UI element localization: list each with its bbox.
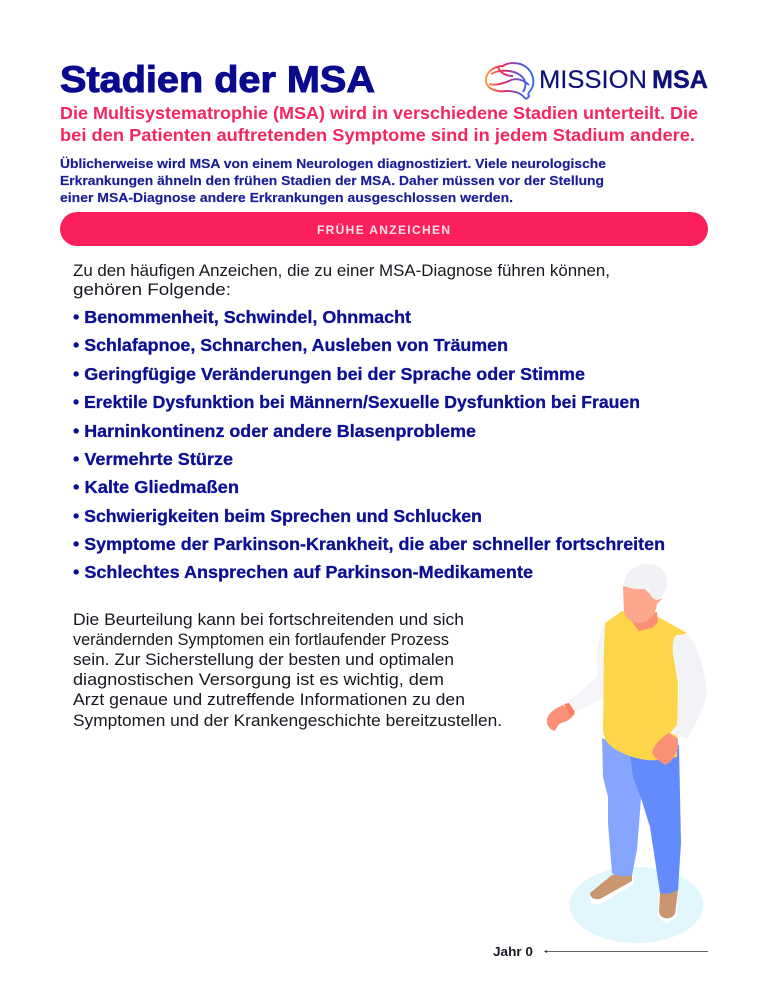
symptom list: • Benommenheit, Schwindel, Ohnmacht xyxy=(73,307,411,327)
symptom list: • Schwierigkeiten beim Sprechen und Schlucken xyxy=(73,506,482,526)
intro text xyxy=(60,156,606,205)
icon: brain outline xyxy=(486,63,533,99)
left hand xyxy=(547,703,575,731)
intro text: einer MSA-Diagnose andere Erkrankungen ausgeschlossen werden. xyxy=(60,190,513,205)
illustration: elderly man standing xyxy=(547,564,707,943)
symptom list: • Schlechtes Ansprechen auf Parkinson-Medikamente xyxy=(73,562,533,582)
timeline: year 0 xyxy=(493,945,708,959)
symptom list: • Schlafapnoe, Schnarchen, Ausleben von Träumen xyxy=(73,335,508,355)
symptom list xyxy=(73,307,665,582)
assessment paragraph: verändernden Symptomen ein fortlaufender Prozess xyxy=(73,630,449,649)
symptom list: • Harninkontinenz oder andere Blasenprobleme xyxy=(73,421,476,441)
ground shadow xyxy=(570,867,704,943)
collar and neck xyxy=(632,612,658,631)
logo: Mission MSA: MSA xyxy=(652,66,708,94)
lead-in text: Zu den häufigen Anzeichen, die zu einer MSA-Diagnose führen können, xyxy=(73,261,610,280)
logo wordmark: MISSION xyxy=(539,66,647,94)
intro text: Erkrankungen ähneln den frühen Stadien der MSA. Daher müssen vor der Stellung xyxy=(60,173,604,188)
lead-in text xyxy=(73,261,610,299)
intro text: Üblicherweise wird MSA von einem Neurologen diagnostiziert. Viele neurologische xyxy=(60,156,606,171)
symptom list: • Symptome der Parkinson-Krankheit, die aber schneller fortschreiten xyxy=(73,534,665,554)
subtitle: Die Multisystematrophie (MSA) wird in verschiedene Stadien unterteilt. Die xyxy=(60,103,698,123)
banner: Frühe Anzeichen: FRÜHE ANZEICHEN xyxy=(317,222,450,237)
vest xyxy=(603,611,687,760)
title: Stadien der MSA xyxy=(60,59,375,100)
subtitle xyxy=(60,103,698,145)
lead-in text: gehören Folgende: xyxy=(73,280,231,299)
hair xyxy=(624,564,667,600)
assessment paragraph: sein. Zur Sicherstellung der besten und optimalen xyxy=(73,650,454,669)
trousers xyxy=(602,738,681,894)
symptom list: • Vermehrte Stürze xyxy=(73,449,233,469)
symptom list: • Kalte Gliedmaßen xyxy=(73,477,239,497)
banner: Frühe Anzeichen xyxy=(60,212,708,246)
symptom list: • Erektile Dysfunktion bei Männern/Sexuelle Dysfunktion bei Frauen xyxy=(73,392,640,412)
assessment paragraph: Symptomen und der Krankengeschichte bereitzustellen. xyxy=(73,711,502,730)
back arm xyxy=(568,620,606,713)
face xyxy=(623,586,663,623)
assessment paragraph: Arzt genaue und zutreffende Informationen zu den xyxy=(73,690,465,709)
assessment paragraph: Die Beurteilung kann bei fortschreitenden und sich xyxy=(73,610,464,629)
shoes xyxy=(589,873,678,924)
timeline: year 0: Jahr 0 xyxy=(493,945,533,959)
subtitle: bei den Patienten auftretenden Symptome sind in jedem Stadium andere. xyxy=(60,125,695,145)
symptom list: • Geringfügige Veränderungen bei der Sprache oder Stimme xyxy=(73,364,585,384)
front arm sleeve xyxy=(670,634,707,739)
assessment paragraph xyxy=(73,610,502,730)
right hand xyxy=(652,733,678,765)
assessment paragraph: diagnostischen Versorgung ist es wichtig, dem xyxy=(73,670,444,689)
logo: Mission MSA xyxy=(486,63,708,99)
